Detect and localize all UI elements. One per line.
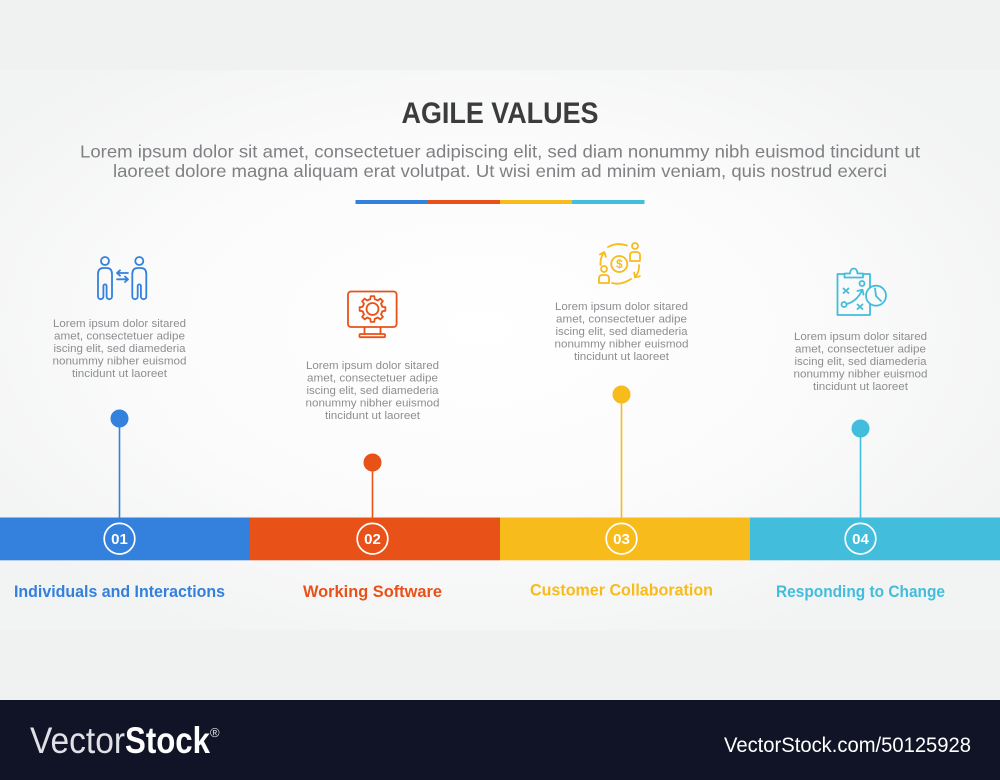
description text: tincidunt ut laoreet [72, 368, 167, 380]
pin marker [612, 386, 630, 518]
number badge 01: 01 [111, 531, 128, 548]
description text: iscing elit, sed diamederia [556, 326, 688, 338]
icon: people exchanging money [599, 243, 640, 284]
description text: nonummy nibher euismod [794, 368, 928, 380]
description text: tincidunt ut laoreet [325, 410, 420, 422]
footer logo [30, 720, 220, 761]
description text: nonummy nibher euismod [554, 338, 689, 350]
icon: monitor with gear [348, 292, 397, 337]
subtitle text block: Lorem ipsum dolor sit amet, consectetuer adipiscing elit, sed diam nonummy nibh euismod tincidunt ut [80, 142, 920, 162]
label: individuals and interactions: Individuals and Interactions [14, 583, 225, 601]
label: working software: Working Software [303, 583, 442, 601]
description text: amet, consectetuer adipe [54, 330, 185, 342]
icon: two people exchanging [98, 257, 146, 299]
description text: tincidunt ut laoreet [574, 351, 669, 363]
description text: Lorem ipsum dolor sitared [555, 301, 688, 313]
description text: iscing elit, sed diamederia [306, 385, 439, 397]
footer image id: VectorStock.com/50125928 [724, 734, 971, 757]
footer band [0, 700, 1000, 780]
description text [52, 318, 187, 380]
icon: clipboard plan with clock [838, 268, 886, 315]
timeline colour band [0, 518, 1000, 560]
description text: Lorem ipsum dolor sitared [306, 360, 439, 372]
subtitle text block: laoreet dolore magna aliquam erat volutpat. Ut wisi enim ad minim veniam, quis nostrud exerci [113, 161, 887, 181]
description text [794, 331, 928, 393]
description text: iscing elit, sed diamederia [54, 343, 186, 355]
number badge 02: 02 [364, 531, 381, 548]
description text: nonummy nibher euismod [52, 356, 187, 368]
description text: amet, consectetuer adipe [556, 314, 687, 326]
panel: customer collaboration [554, 243, 689, 518]
description text: Lorem ipsum dolor sitared [53, 318, 186, 330]
panel: responding to change [794, 268, 928, 518]
description text: amet, consectetuer adipe [795, 344, 926, 356]
description text [306, 360, 440, 422]
footer logo: ® [210, 725, 220, 740]
title: AGILE VALUES [402, 97, 598, 130]
subtitle text block [80, 142, 920, 181]
description text [554, 301, 689, 363]
icon: people exchanging money: $ [616, 259, 623, 271]
title underline colour bar [356, 200, 644, 204]
pin marker [110, 410, 128, 518]
label: responding to change: Responding to Change [776, 583, 945, 601]
description text: Lorem ipsum dolor sitared [794, 331, 927, 343]
pin marker [852, 420, 870, 518]
number badge 03: 03 [613, 531, 630, 548]
number badge 04 [845, 523, 876, 554]
description text: iscing elit, sed diamederia [794, 356, 927, 368]
description text: tincidunt ut laoreet [813, 381, 908, 393]
panel: individuals and interactions [52, 257, 187, 518]
footer logo: Vector [30, 720, 125, 761]
pin marker [364, 454, 382, 518]
description text: amet, consectetuer adipe [307, 372, 438, 384]
footer logo: Stock [125, 720, 210, 761]
label: customer collaboration: Customer Collaboration [530, 582, 713, 600]
number badge 03 [606, 523, 637, 554]
description text: nonummy nibher euismod [306, 398, 440, 410]
number badge 01 [104, 523, 135, 554]
number badge 02 [357, 523, 388, 554]
panel: working software [306, 292, 440, 518]
number badge 04: 04 [852, 531, 869, 548]
